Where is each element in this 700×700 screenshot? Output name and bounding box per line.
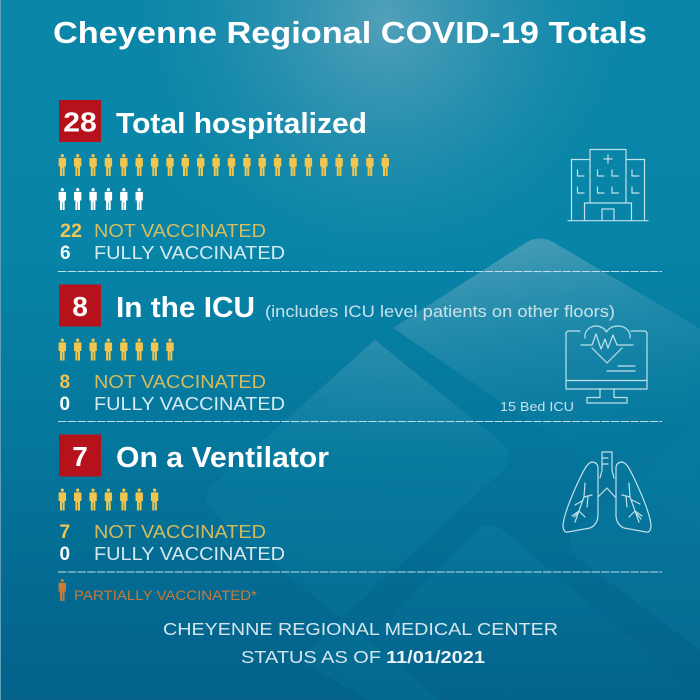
stat: 7 not vaccinated: 7 [60, 522, 70, 543]
legend: partially vaccinated [59, 579, 258, 603]
stat: 6 fully vaccinated: FULLY VACCINATED [94, 242, 285, 263]
count badge: 8: 8 [72, 291, 88, 322]
stat: 7 not vaccinated: NOT VACCINATED [94, 521, 266, 542]
footer: status date: 11/01/2021 [386, 647, 485, 667]
stat: 22 not vaccinated: NOT VACCINATED [94, 220, 266, 241]
stat: 8 not vaccinated: 8 [60, 372, 70, 393]
count badge: 28: 28 [63, 106, 97, 138]
stat: 6 fully vaccinated: 6 [60, 243, 71, 264]
stat: 0 fully vaccinated: 0 [60, 394, 70, 415]
heading: on a ventilator: On a Ventilator [116, 442, 329, 474]
count badge: 28 [59, 100, 101, 142]
icons: 6 fully vaccinated people [59, 188, 143, 210]
stat: 0 fully vaccinated: 0 [60, 544, 70, 565]
panel: in the ICU [59, 284, 647, 415]
count badge: 7: 7 [72, 441, 88, 472]
icons: 22 not vaccinated people [59, 154, 389, 176]
icons: 7 not vaccinated people [59, 488, 158, 510]
stat: 0 fully vaccinated: FULLY VACCINATED [94, 393, 285, 414]
label: partially vaccinated: PARTIALLY VACCINATED* [74, 588, 258, 603]
footer: status date [241, 647, 485, 667]
icon: hospital building [568, 150, 648, 221]
title: Cheyenne Regional COVID-19 Totals [53, 15, 647, 50]
footer: medical center name: CHEYENNE REGIONAL MEDICAL CENTER [163, 619, 558, 639]
label: 15 bed ICU: 15 Bed ICU [500, 399, 574, 414]
icons: 8 not vaccinated people [59, 338, 174, 360]
count badge: 8 [59, 284, 101, 326]
footer: status date: STATUS AS OF [241, 647, 381, 667]
count badge: 7 [59, 434, 101, 476]
icon: partially vaccinated person [59, 579, 66, 601]
panel: total hospitalized [59, 100, 648, 264]
heading: in the ICU: In the ICU [116, 292, 255, 324]
icon: lungs [563, 452, 651, 532]
panel: on a ventilator [59, 434, 651, 565]
stat: 0 fully vaccinated: FULLY VACCINATED [94, 543, 285, 564]
icon: heart monitor [566, 326, 647, 403]
heading: total hospitalized: Total hospitalized [116, 108, 367, 140]
stat: 22 not vaccinated: 22 [60, 221, 82, 242]
note: includes ICU level patients: (includes ICU level patients on other floors) [265, 303, 615, 321]
stat: 8 not vaccinated: NOT VACCINATED [94, 371, 266, 392]
